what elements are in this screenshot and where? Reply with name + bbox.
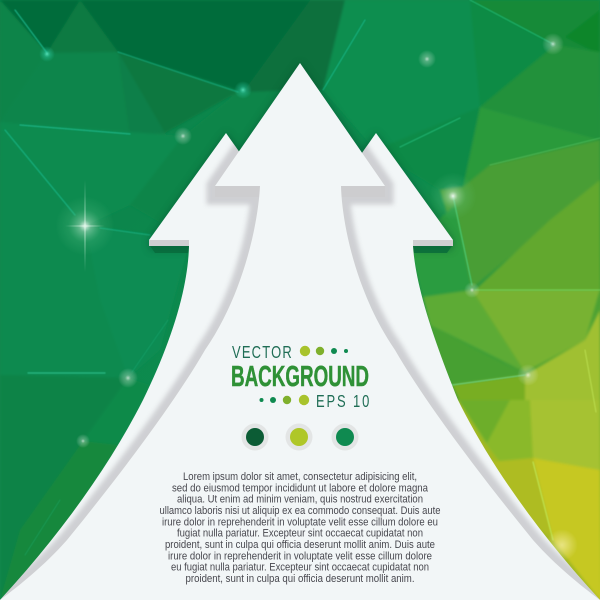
colour swatch: dark green [242, 424, 268, 450]
body text block: Lorem ipsum dolor sit amet, consectetur adipisicing elit, [183, 471, 417, 483]
arrow cast shadows on background [149, 63, 453, 250]
colour swatch: green [332, 424, 358, 450]
body text block: aliqua. Ut enim ad minim veniam, quis nostrud exercitation [177, 494, 423, 506]
subtitle: EPS 10: EPS 10 [316, 392, 370, 412]
body text block: eu fugiat nulla pariatur. Excepteur sint occaecat cupidatat non [171, 562, 429, 574]
star glows [39, 33, 578, 561]
dots row: bottom [260, 395, 309, 405]
body text block: irure dolor in reprehenderit in voluptate velit esse cillum dolore [168, 550, 432, 562]
body text block: ullamco laboris nisi ut aliquip ex ea commodo consequat. Duis aute [160, 505, 440, 517]
body text block: proident, sunt in culpa qui officia deserunt mollit anim. [186, 573, 414, 585]
body text block: irure dolor in reprehenderit in voluptate velit esse cillum dolore eu [162, 516, 438, 528]
dots row: top [300, 346, 348, 356]
title: BACKGROUND: BACKGROUND [231, 361, 369, 393]
colour swatch: lime [286, 424, 312, 450]
body text block: proident, sunt in culpa qui officia deserunt mollit anim. Duis aute [165, 539, 435, 551]
side arrows [0, 133, 600, 600]
centre arrow shadow on side arrows [0, 143, 600, 600]
body text block [160, 471, 440, 585]
dark base shadows under side arrows [150, 246, 452, 253]
body text block: sed do eiusmod tempor incididunt ut labore et dolore magna [172, 482, 429, 494]
body text block: fugiat nulla pariatur. Excepteur sint occaecat cupidatat non [177, 528, 423, 540]
title: VECTOR: VECTOR [232, 343, 292, 363]
